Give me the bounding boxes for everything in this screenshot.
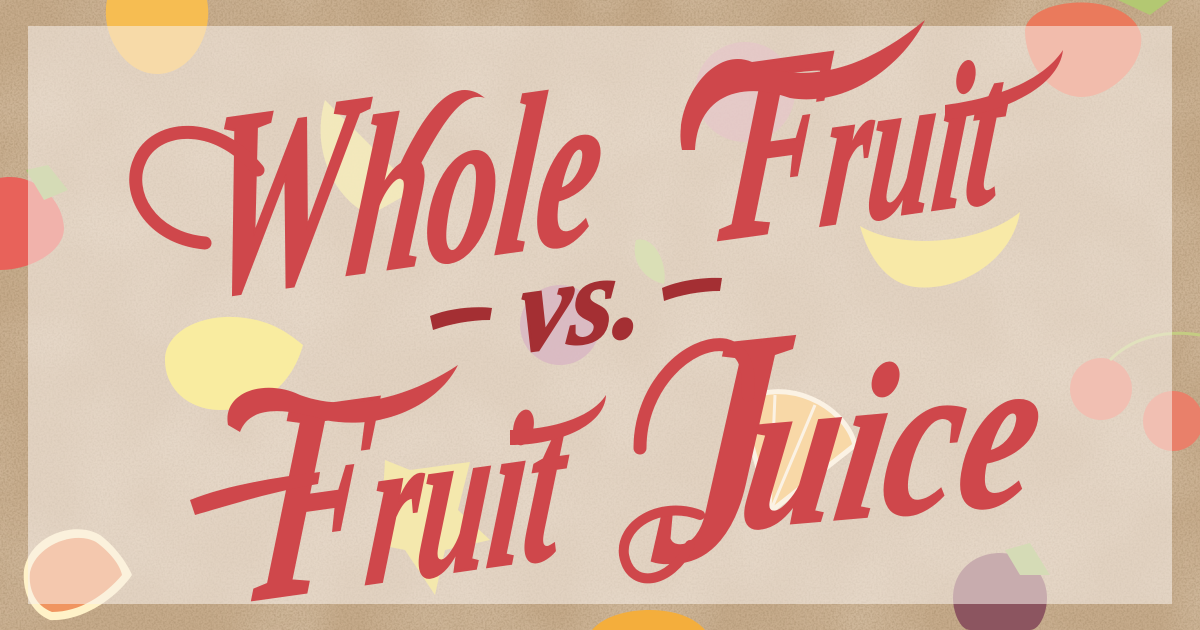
heading word: J: J <box>641 261 804 630</box>
title: Whole Fruit <box>136 0 1063 355</box>
title: Fruit Juice <box>190 334 1038 602</box>
flourish: W swash <box>136 132 258 243</box>
flourish: J hook <box>624 511 700 578</box>
subtitle: vs. <box>430 278 722 352</box>
icon: orange bottom <box>592 610 705 630</box>
icon: leaf and plum <box>520 239 665 365</box>
flourish: lower F bar <box>227 365 458 432</box>
dash left <box>430 307 492 330</box>
icon: raspberry top <box>695 42 795 142</box>
dash right <box>662 278 722 301</box>
flourish: lower F foot <box>190 472 320 515</box>
icon: orange top left <box>106 0 208 74</box>
icon: cherries <box>1070 333 1200 451</box>
flourish: h swash <box>400 90 485 180</box>
icon: strawberry left <box>0 165 68 270</box>
icon: orange slice <box>740 392 855 512</box>
icon: grapefruit half <box>24 529 132 620</box>
icon: blackberry <box>953 543 1050 630</box>
icon: lemon <box>165 317 303 410</box>
text: vs.: vs. <box>513 224 652 380</box>
icon: banana <box>860 212 1020 288</box>
flourish: F top bar <box>680 20 925 150</box>
heading word: Whole: Whole <box>190 1 619 355</box>
flourish: J loop <box>640 345 748 448</box>
flourish: t swash <box>945 50 1063 120</box>
icon: lemon slice <box>320 100 404 210</box>
icon: strawberry top right <box>1025 0 1170 97</box>
heading word: uice: uice <box>728 305 1059 577</box>
flourish: lower t swash <box>510 395 606 445</box>
icon: star fruit <box>380 460 490 595</box>
